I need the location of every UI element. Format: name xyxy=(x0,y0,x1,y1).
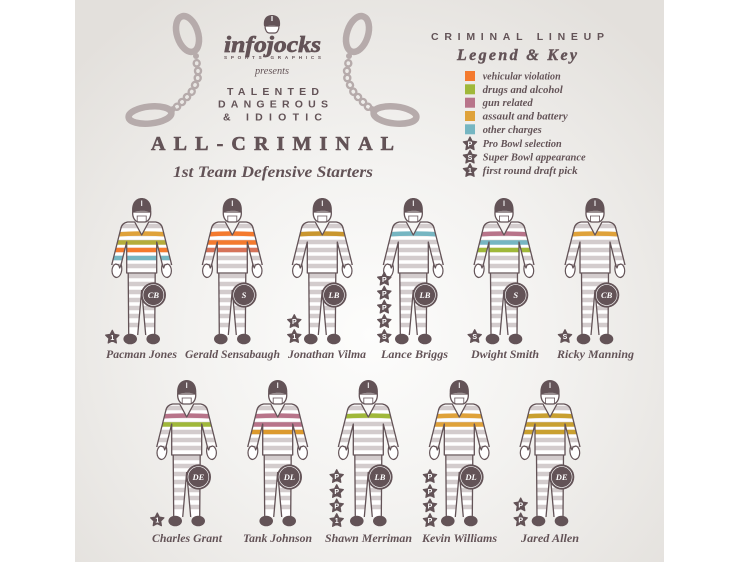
player: Jared Allen: P xyxy=(518,518,523,524)
player: Tank Johnson: DL xyxy=(283,472,295,482)
player: Kevin Williams xyxy=(421,380,497,545)
player: Lance Briggs xyxy=(378,198,448,361)
player: Charles Grant: 1 xyxy=(155,518,159,524)
legend: pro bowl: Pro Bowl selection xyxy=(483,139,562,150)
icon: right handcuff xyxy=(342,13,417,126)
player: Shawn Merriman: 1 xyxy=(335,518,339,525)
legend: first round pick xyxy=(463,164,578,177)
player: Dwight Smith xyxy=(468,198,539,361)
heading: talented dangerous idiotic xyxy=(218,86,328,124)
player: Gerald Sensabaugh xyxy=(185,198,280,361)
player: Kevin Williams: P xyxy=(428,504,433,510)
player: Ricky Manning xyxy=(556,198,634,361)
player: Dwight Smith: S xyxy=(513,290,518,300)
logo: infojocks: SPORTS GRAPHICS xyxy=(224,55,321,60)
title: ALL-CRIMINAL xyxy=(151,133,394,155)
heading: talented dangerous idiotic: & IDIOTIC xyxy=(223,112,322,124)
heading: talented dangerous idiotic: TALENTED xyxy=(227,86,319,98)
panel: legend xyxy=(431,31,604,177)
player: Kevin Williams: Kevin Williams xyxy=(421,531,497,545)
player: Tank Johnson xyxy=(243,380,312,545)
player: Shawn Merriman xyxy=(325,380,412,545)
player: Jonathan Vilma: P xyxy=(292,319,297,326)
legend: other charges: other charges xyxy=(483,125,542,136)
player: Lance Briggs: P xyxy=(382,277,387,284)
player: Jared Allen: Jared Allen xyxy=(520,531,579,545)
player: Shawn Merriman: Shawn Merriman xyxy=(325,531,412,545)
legend: pro bowl: P xyxy=(468,142,473,148)
legend: drugs and alcohol: drugs and alcohol xyxy=(483,85,563,96)
player: Dwight Smith: S xyxy=(472,334,477,341)
player: Kevin Williams: DL xyxy=(464,472,477,482)
player: Charles Grant xyxy=(151,380,223,545)
player: Pacman Jones: 1 xyxy=(110,335,114,342)
player: Shawn Merriman: P xyxy=(334,504,339,510)
player: Dwight Smith: Dwight Smith xyxy=(470,347,539,361)
legend: assault and battery: assault and battery xyxy=(483,112,568,122)
player: Kevin Williams: P xyxy=(428,518,433,525)
text: presents: presents xyxy=(254,66,289,77)
player: Lance Briggs: Lance Briggs xyxy=(380,347,448,361)
legend heading: CRIMINAL LINEUP xyxy=(431,31,604,43)
player: Jared Allen: DE xyxy=(555,472,568,482)
legend: first round pick: first round draft pick xyxy=(483,166,578,177)
heading: talented dangerous idiotic: DANGEROUS xyxy=(218,98,328,110)
player: Pacman Jones xyxy=(106,198,177,361)
player: Charles Grant: Charles Grant xyxy=(152,531,223,545)
player: Lance Briggs: P xyxy=(382,319,387,326)
player: Kevin Williams: P xyxy=(428,474,433,481)
player: Jonathan Vilma: 1 xyxy=(292,334,296,341)
player: Pacman Jones: Pacman Jones xyxy=(106,347,177,361)
logo: infojocks xyxy=(224,15,321,60)
legend: vehicular violation: vehicular violation xyxy=(483,72,561,82)
player: Ricky Manning: CB xyxy=(601,290,613,300)
legend title: Legend & Key xyxy=(456,47,578,64)
player: Shawn Merriman: P xyxy=(334,474,339,481)
legend: first round pick: 1 xyxy=(468,168,472,175)
player: Pacman Jones: CB xyxy=(148,290,159,300)
player: Gerald Sensabaugh: S xyxy=(242,290,247,300)
player: Ricky Manning: S xyxy=(563,334,568,341)
legend: gun related: gun related xyxy=(482,98,533,109)
player: Lance Briggs: P xyxy=(382,291,387,298)
icon: left handcuff xyxy=(128,13,203,126)
player: Jared Allen xyxy=(514,380,582,545)
player: Lance Briggs: LB xyxy=(419,290,431,300)
legend: super bowl: S xyxy=(468,155,473,162)
player: Tank Johnson: Tank Johnson xyxy=(243,531,312,545)
player: Shawn Merriman: LB xyxy=(374,472,386,482)
player: Lance Briggs: P xyxy=(382,305,387,312)
player: Shawn Merriman: P xyxy=(334,489,339,496)
player: Ricky Manning: Ricky Manning xyxy=(556,347,634,361)
player: Jonathan Vilma xyxy=(287,198,366,361)
logo: infojocks: infojocks xyxy=(224,32,321,57)
player: Jared Allen: P xyxy=(518,502,523,510)
player: Charles Grant: DE xyxy=(191,472,205,482)
player: Jonathan Vilma: Jonathan Vilma xyxy=(287,347,366,361)
player: Kevin Williams: P xyxy=(428,489,433,496)
legend: super bowl: Super Bowl appearance xyxy=(483,152,586,164)
player: Lance Briggs: S xyxy=(382,334,387,341)
legend: pro bowl xyxy=(463,137,562,150)
player: Gerald Sensabaugh: Gerald Sensabaugh xyxy=(185,347,280,361)
player: Jonathan Vilma: LB xyxy=(328,290,340,300)
subtitle: 1st Team Defensive Starters xyxy=(173,164,373,181)
